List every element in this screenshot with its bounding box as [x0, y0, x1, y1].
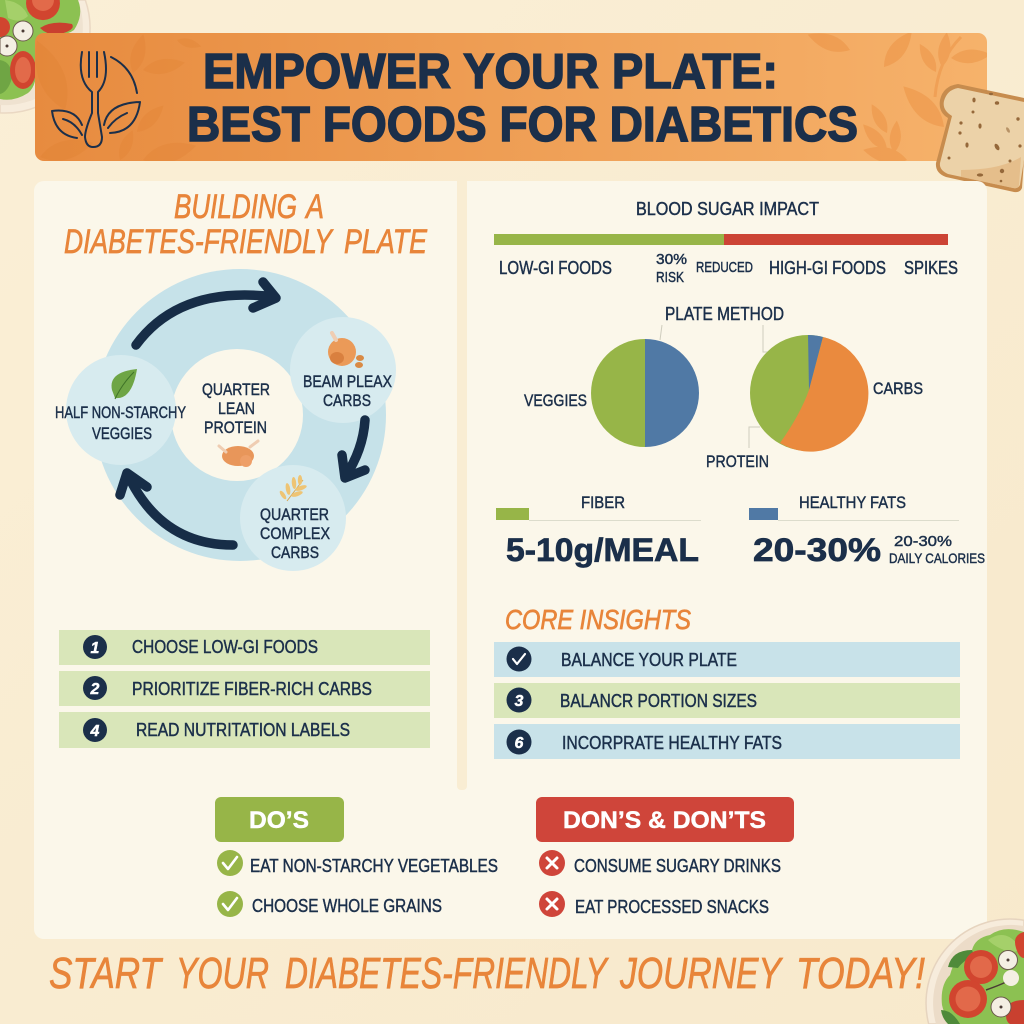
do item 1: EAT NON-STARCHY VEGETABLES — [250, 856, 498, 876]
stat: fiber: 5-10g/MEAL — [506, 532, 699, 568]
panel: do's — [215, 797, 498, 917]
don'ts button: DON’S & DON’TS — [563, 807, 766, 834]
heading: core insights: CORE INSIGHTS — [505, 604, 691, 635]
panel: don'ts — [536, 797, 794, 917]
main panels — [34, 176, 987, 939]
decorative header leaves — [25, 27, 991, 169]
stat: fiber: FIBER — [581, 493, 625, 512]
don'ts button — [536, 797, 794, 842]
do item 2: CHOOSE WHOLE GRAINS — [252, 896, 442, 916]
tip 2: 2 — [90, 681, 100, 698]
stat: healthy fats — [749, 493, 985, 568]
tip 3 — [59, 712, 430, 748]
do's button: DO’S — [249, 807, 309, 834]
center circle: quarter lean protein: PROTEIN — [204, 418, 267, 437]
center circle: quarter lean protein: LEAN — [218, 399, 255, 418]
icon: roast chicken — [219, 441, 258, 467]
panel: blood sugar and stats — [494, 199, 985, 759]
footer call to action: TODAY! — [796, 949, 925, 998]
node: quarter complex carbs — [240, 465, 346, 571]
center circle: quarter lean protein: QUARTER — [202, 380, 270, 399]
node: quarter complex carbs: CARBS — [271, 543, 319, 562]
pie chart: half and half — [591, 339, 699, 447]
icon: salad plate top left — [0, 0, 90, 113]
node: half non-starchy veggies: VEGGIES — [92, 424, 152, 443]
insight 3 — [494, 724, 960, 759]
node: quarter complex carbs: COMPLEX — [260, 524, 330, 543]
bar labels: 30% — [656, 251, 687, 268]
stat: healthy fats: 20-30% — [753, 532, 881, 568]
insights list — [494, 642, 960, 759]
insight 1: BALANCE YOUR PLATE — [561, 650, 737, 670]
arrow: bottom — [120, 473, 233, 545]
bar chart: glycemic range — [494, 234, 948, 245]
bar labels: LOW-GI FOODS — [499, 258, 612, 278]
bar labels: SPIKES — [904, 258, 958, 278]
don't item 2: EAT PROCESSED SNACKS — [575, 897, 769, 917]
icon: wheat — [278, 475, 307, 501]
stat: healthy fats: DAILY CALORIES — [889, 550, 985, 566]
icon: salad plate bottom right — [926, 919, 1024, 1024]
pie label: carbs: CARBS — [873, 379, 923, 398]
icon: bread slice — [936, 84, 1024, 192]
tip 2 — [59, 671, 430, 706]
insight 3: 6 — [515, 735, 524, 752]
tip 3: READ NUTRITATION LABELS — [136, 720, 350, 740]
footer call to action: START — [49, 949, 163, 998]
footer call to action: JOURNEY — [619, 949, 783, 998]
don't item 1: CONSUME SUGARY DRINKS — [574, 856, 781, 876]
bar labels — [499, 251, 958, 286]
cycle diagram — [55, 269, 396, 571]
icon: green leaf — [112, 369, 137, 399]
node: half non-starchy veggies — [55, 355, 186, 465]
leader lines — [660, 325, 767, 448]
tip 1: CHOOSE LOW-GI FOODS — [132, 637, 318, 657]
pie label: protein: PROTEIN — [706, 452, 769, 471]
stat: healthy fats: 20-30% — [894, 533, 952, 550]
panel: building a plate — [55, 188, 430, 748]
pie chart: carbs and protein — [750, 335, 868, 452]
tips list — [59, 630, 430, 748]
heading: diabetes-friendly plate: DIABETES-FRIENDLY — [64, 223, 334, 261]
center circle: quarter lean protein — [171, 349, 303, 481]
insight 2: BALANCR PORTION SIZES — [560, 691, 757, 711]
heading: plate method: PLATE METHOD — [665, 304, 784, 324]
footer call to action: YOUR — [176, 949, 269, 998]
stat: healthy fats: HEALTHY FATS — [799, 493, 906, 512]
insight 1 — [494, 642, 960, 677]
bar labels: REDUCED — [696, 259, 753, 276]
tip 1 — [59, 630, 430, 665]
footer call to action — [49, 949, 925, 998]
don't item 2 — [539, 891, 769, 917]
heading: blood sugar impact: BLOOD SUGAR IMPACT — [636, 199, 819, 219]
node: beam pleax carbs: CARBS — [323, 391, 371, 410]
tip 1: 1 — [91, 640, 100, 657]
title line 1: EMPOWER YOUR PLATE: — [203, 45, 778, 99]
insight 2 — [494, 683, 960, 718]
icon: fork and leaves — [52, 52, 140, 147]
bar labels: RISK — [656, 269, 684, 286]
title line 2: BEST FOODS FOR DIABETICS — [187, 98, 858, 152]
node: half non-starchy veggies: HALF NON-STARCHY — [55, 403, 186, 422]
icon: chicken with beans — [328, 333, 364, 368]
heading: building a: A — [304, 188, 324, 226]
heading: building a: BUILDING — [174, 188, 297, 226]
node: beam pleax carbs — [290, 317, 396, 423]
pie label: veggies: VEGGIES — [524, 391, 587, 410]
header banner — [35, 33, 987, 161]
do's button — [215, 797, 344, 842]
arrow: top — [136, 282, 276, 345]
arrow: right — [342, 420, 365, 478]
stat: fiber — [496, 493, 701, 568]
insight 2: 3 — [515, 693, 524, 710]
heading: diabetes-friendly plate: PLATE — [344, 223, 427, 261]
insight 3: INCORPRATE HEALTHY FATS — [562, 733, 782, 753]
node: beam pleax carbs: BEAM PLEAX — [303, 372, 392, 391]
tip 2: PRIORITIZE FIBER-RICH CARBS — [132, 679, 372, 699]
footer call to action: DIABETES-FRIENDLY — [285, 949, 609, 998]
tip 3: 4 — [90, 723, 100, 740]
do item 2 — [217, 891, 442, 917]
node: quarter complex carbs: QUARTER — [260, 505, 329, 524]
don't item 1 — [539, 850, 781, 876]
bar labels: HIGH-GI FOODS — [769, 258, 886, 278]
do item 1 — [217, 850, 498, 876]
